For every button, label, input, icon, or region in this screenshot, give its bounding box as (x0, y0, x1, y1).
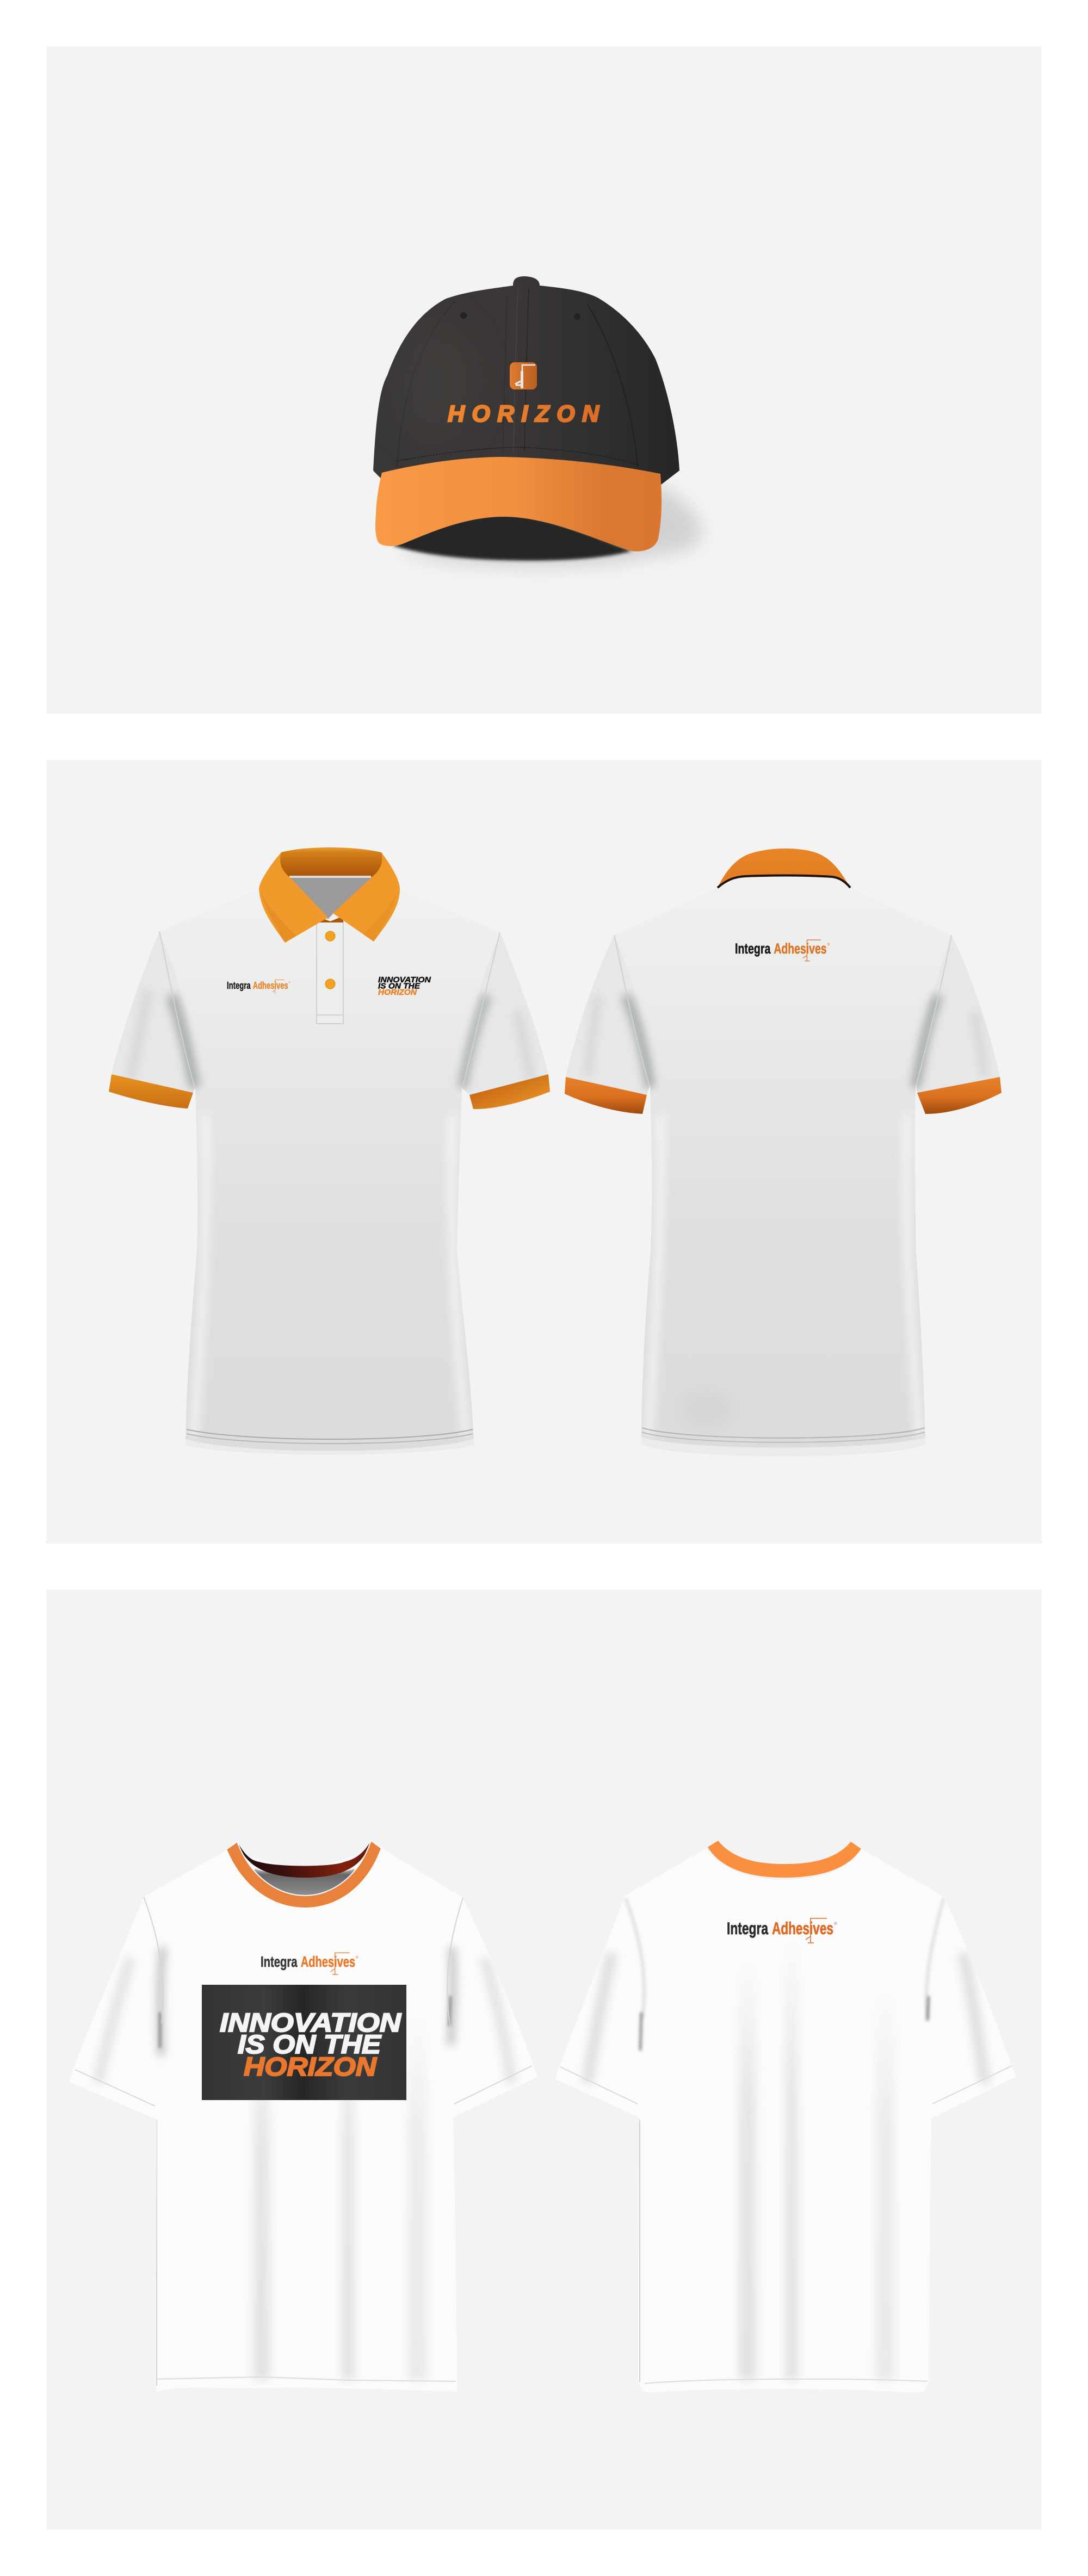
integra adhesives logo: t-shirt front: ® (356, 1955, 359, 1960)
polo back body (566, 876, 1000, 1463)
t-shirt back collar (708, 1841, 861, 1878)
polo front collar (259, 847, 400, 943)
slogan print block: IS ON THE (238, 2030, 382, 2059)
button (325, 979, 335, 989)
integra adhesives logo: polo front: Adhesives (253, 980, 288, 991)
panel: cap (46, 46, 1042, 714)
polo front (109, 847, 550, 1458)
cap cast shadow (397, 484, 702, 567)
cap mockup (373, 276, 702, 567)
polo front right cuff (469, 1074, 550, 1109)
tagline: polo front: INNOVATION (378, 975, 431, 984)
tagline: polo front: IS ON THE (378, 981, 421, 991)
t-shirt front inner neck (237, 1841, 371, 1898)
polo front body (112, 889, 548, 1458)
polo back right cuff (917, 1077, 1002, 1114)
integra adhesives logo: polo front (227, 980, 290, 994)
integra adhesives logo: polo back: ® (827, 942, 830, 946)
cap wordmark: HORIZON (448, 401, 599, 427)
polo back collar (718, 849, 850, 888)
button (325, 931, 335, 941)
t-shirt back body (555, 1848, 1016, 2393)
integra adhesives logo: t-shirt back (727, 1918, 837, 1943)
integra adhesives logo: polo back: Integra (735, 940, 771, 957)
polo front placket (317, 921, 343, 1024)
tagline: polo front: HORIZON (378, 988, 417, 997)
underside shadow of brim (393, 514, 632, 561)
icon: horizon badge (510, 362, 537, 389)
polo back left cuff (565, 1077, 647, 1114)
slogan print block (202, 1985, 406, 2100)
polo back (565, 849, 1002, 1463)
panel background: t-shirts (46, 1590, 1042, 2530)
integra adhesives logo: polo front: ® (288, 981, 290, 984)
cap brim (375, 457, 662, 552)
panel: t-shirts (46, 1590, 1042, 2530)
t-shirt front (69, 1841, 537, 2392)
integra adhesives logo: t-shirt back: Adhesives (772, 1918, 833, 1938)
t-shirt front body (75, 1896, 532, 2386)
integra adhesives logo: t-shirt back: Integra (727, 1918, 768, 1938)
panel background: cap (46, 46, 1042, 714)
slogan print block: INNOVATION (220, 2009, 402, 2038)
panel: polo shirts (46, 760, 1042, 1544)
integra adhesives logo: t-shirt front: Adhesives (301, 1953, 355, 1970)
integra adhesives logo: polo front: Integra (227, 980, 251, 991)
t-shirt front collar (226, 1841, 381, 1908)
integra adhesives logo: polo back (735, 940, 830, 961)
integra adhesives logo: polo back: Adhesives (774, 940, 827, 957)
polo back collar trim (718, 875, 850, 888)
cap crown (373, 276, 679, 485)
integra adhesives logo: t-shirt back: ® (834, 1921, 837, 1926)
integra adhesives logo: t-shirt front: Integra (261, 1953, 298, 1970)
slogan print block: HORIZON (244, 2053, 377, 2082)
tagline: polo front (378, 975, 431, 997)
polo front left cuff (109, 1074, 193, 1109)
t-shirt back (555, 1841, 1016, 2393)
panel background: polo (46, 760, 1042, 1544)
integra adhesives logo: t-shirt front (261, 1953, 359, 1974)
